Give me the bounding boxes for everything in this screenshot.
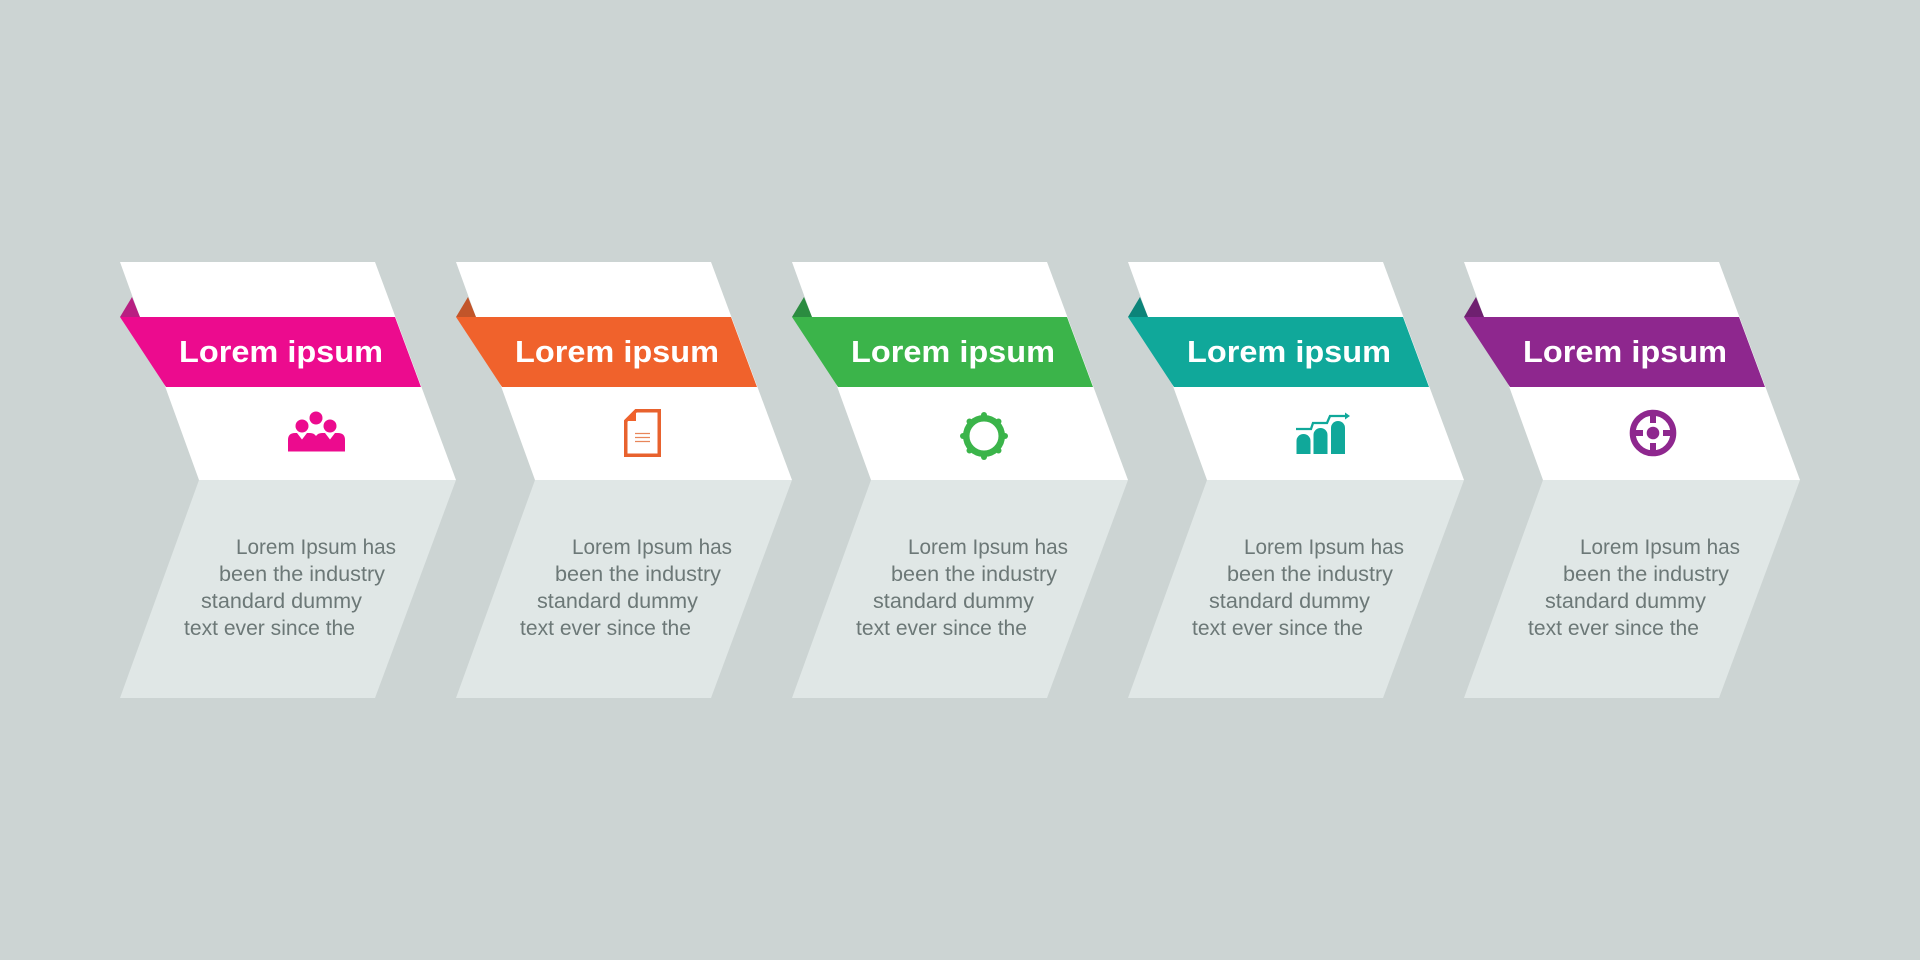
body text: standard dummy	[201, 589, 362, 613]
body text: standard dummy	[873, 589, 1034, 613]
light chevron bottom	[1128, 480, 1464, 698]
body text: text ever since the	[520, 616, 691, 640]
body text: Lorem Ipsum has	[1244, 535, 1404, 559]
body text: text ever since the	[1192, 616, 1363, 640]
light chevron bottom	[120, 480, 456, 698]
panel: step 3	[792, 262, 1128, 698]
ribbon heading band	[1464, 317, 1765, 387]
body text: been the industry	[219, 562, 385, 586]
body text: Lorem Ipsum has	[236, 535, 396, 559]
ribbon heading band	[456, 317, 757, 387]
body text	[1192, 535, 1404, 640]
icon: gear	[963, 415, 1005, 457]
body text: text ever since the	[184, 616, 355, 640]
white chevron top	[792, 262, 1128, 480]
ribbon fold	[792, 297, 812, 317]
body text: been the industry	[555, 562, 721, 586]
body text: standard dummy	[1545, 589, 1706, 613]
heading: Lorem ipsum	[1523, 334, 1727, 369]
panel: step 4	[1128, 262, 1464, 698]
panel: step 5	[1464, 262, 1800, 698]
body text	[856, 535, 1068, 640]
white chevron top	[1464, 262, 1800, 480]
heading: Lorem ipsum	[179, 334, 383, 369]
body text	[184, 535, 396, 640]
body text: been the industry	[891, 562, 1057, 586]
white chevron top	[1128, 262, 1464, 480]
light chevron bottom	[1464, 480, 1800, 698]
body text: been the industry	[1563, 562, 1729, 586]
heading: Lorem ipsum	[851, 334, 1055, 369]
body text: standard dummy	[1209, 589, 1370, 613]
ribbon fold	[1464, 297, 1484, 317]
ribbon fold	[456, 297, 476, 317]
heading: Lorem ipsum	[1187, 334, 1391, 369]
heading: Lorem ipsum	[515, 334, 719, 369]
light chevron bottom	[792, 480, 1128, 698]
icon: target	[1633, 413, 1673, 453]
panel: step 2	[456, 262, 792, 698]
icon: growth chart	[1296, 412, 1350, 454]
body text	[520, 535, 732, 640]
body text: Lorem Ipsum has	[572, 535, 732, 559]
icon: people	[288, 412, 345, 452]
body text: text ever since the	[1528, 616, 1699, 640]
light chevron bottom	[456, 480, 792, 698]
panel: step 1	[120, 262, 456, 698]
ribbon fold	[120, 297, 140, 317]
body text: been the industry	[1227, 562, 1393, 586]
white chevron top	[120, 262, 456, 480]
ribbon heading band	[792, 317, 1093, 387]
body text: Lorem Ipsum has	[908, 535, 1068, 559]
ribbon heading band	[1128, 317, 1429, 387]
ribbon fold	[1128, 297, 1148, 317]
body text	[1528, 535, 1740, 640]
ribbon heading band	[120, 317, 421, 387]
icon: document	[624, 409, 659, 455]
body text: standard dummy	[537, 589, 698, 613]
white chevron top	[456, 262, 792, 480]
body text: Lorem Ipsum has	[1580, 535, 1740, 559]
body text: text ever since the	[856, 616, 1027, 640]
